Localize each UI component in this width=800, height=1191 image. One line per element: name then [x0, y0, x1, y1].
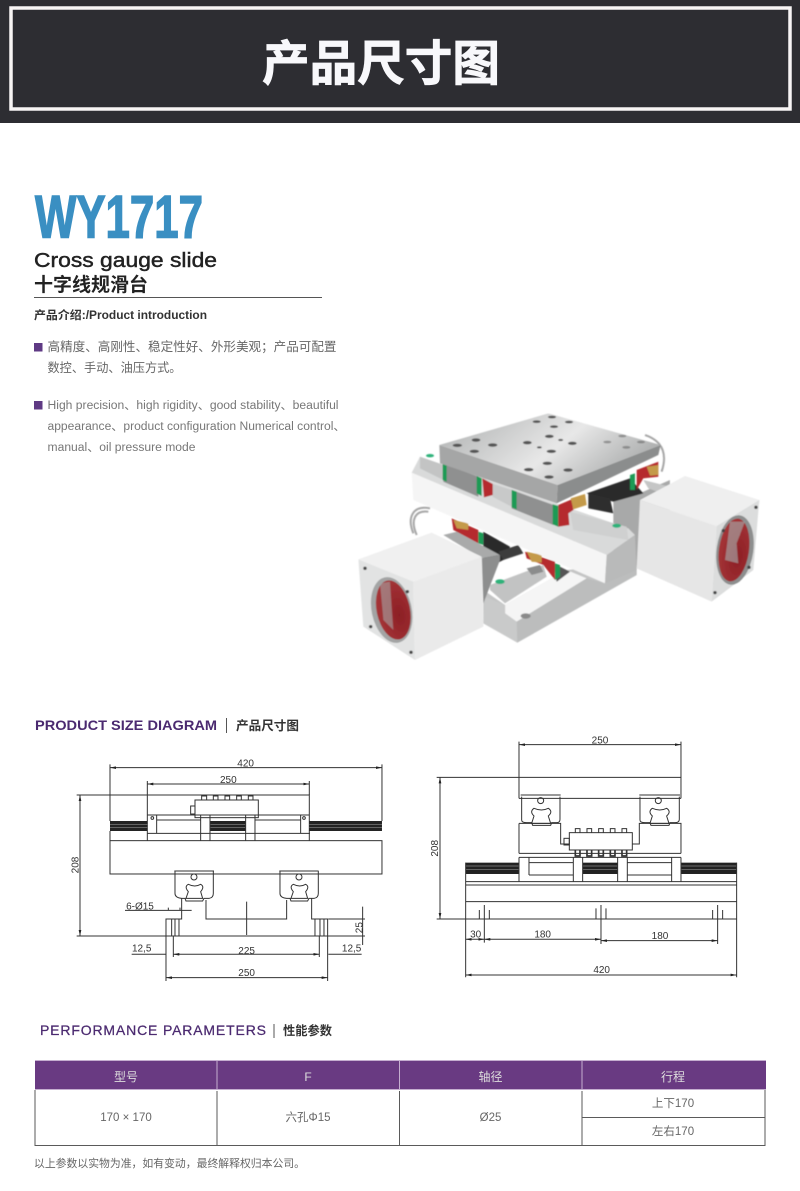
table body: 六孔Φ15: [286, 1111, 330, 1124]
table header: F: [304, 1070, 312, 1084]
right box: [637, 476, 759, 602]
front-view dimension drawing: 250: [220, 775, 237, 786]
front-view dimension drawing: 420: [237, 759, 254, 770]
product name: [34, 250, 322, 298]
side-view dimension drawing: 420: [593, 965, 610, 976]
cables: [411, 435, 664, 535]
table header: 型号: [114, 1070, 138, 1084]
top plate: [439, 413, 661, 503]
product photo illustration: [358, 413, 759, 660]
English description: High precision、high rigidity、good stability、beautiful: [48, 400, 339, 412]
side-view dimension drawing: 180: [534, 930, 551, 941]
right support block: [613, 480, 670, 570]
table header: 行程: [661, 1069, 685, 1084]
footnote: 以上参数以实物为准，如有变动，最终解释权归本公司。: [34, 1156, 305, 1170]
front-view dimension drawing: 250: [238, 968, 255, 979]
side-view dimension drawing: 208: [430, 840, 441, 857]
white middle slide: [412, 457, 637, 583]
side-view dimension drawing: 250: [592, 735, 609, 746]
English description: manual、oil pressure mode: [48, 442, 196, 454]
front-view dimension drawing: 12,5: [342, 944, 362, 955]
model number: WY1717: [35, 184, 203, 250]
Chinese description: 高精度、高刚性、稳定性好、外形美观；产品可配置: [48, 339, 336, 354]
table body: 170 × 170: [100, 1112, 152, 1124]
front-view dimension drawing: 12,5: [132, 944, 152, 955]
table body: 上下170: [652, 1097, 694, 1110]
table header: [35, 1060, 766, 1090]
front-view dimension drawing: 6-Ø15: [126, 901, 154, 912]
table body: 左右170: [652, 1124, 694, 1138]
section heading: product size diagram: PRODUCT SIZE DIAGRAM: [35, 717, 217, 733]
English description: [34, 400, 346, 454]
front-view dimension drawing: 225: [238, 946, 255, 957]
front-view dimension drawing: 25: [354, 922, 365, 933]
section heading: performance parameters: PERFORMANCE PARAMETERS: [40, 1022, 266, 1038]
section heading: performance parameters: 性能参数: [283, 1023, 333, 1038]
front-view dimension drawing: [70, 759, 382, 981]
section heading: product size diagram: [35, 717, 299, 733]
parameter table: [35, 1060, 766, 1146]
left box: [358, 533, 483, 660]
side-view dimension drawing: 180: [652, 931, 669, 942]
product name: 十字线规滑台: [34, 273, 148, 296]
Chinese description: 数控、手动、油压方式。: [48, 360, 182, 375]
title: 产品尺寸图: [262, 38, 500, 91]
upper rails: [420, 457, 443, 480]
table body: [35, 1090, 765, 1146]
side-view dimension drawing: [430, 735, 737, 977]
product name: Cross gauge slide: [34, 250, 217, 272]
table header: 轴径: [478, 1069, 503, 1084]
section heading: product size diagram: 产品尺寸图: [236, 718, 299, 733]
header banner: [0, 0, 800, 123]
table body: Ø25: [480, 1112, 501, 1124]
lower carriage section: [483, 532, 510, 567]
front-view dimension drawing: 208: [70, 856, 81, 873]
upper carriages: [443, 463, 478, 497]
Chinese description: [34, 339, 336, 375]
side-view dimension drawing: 30: [470, 930, 482, 941]
base: [483, 563, 637, 643]
English description: appearance、product configuration Numerical control、: [48, 421, 346, 433]
intro heading: 产品介绍:/Product introduction: [34, 308, 207, 322]
